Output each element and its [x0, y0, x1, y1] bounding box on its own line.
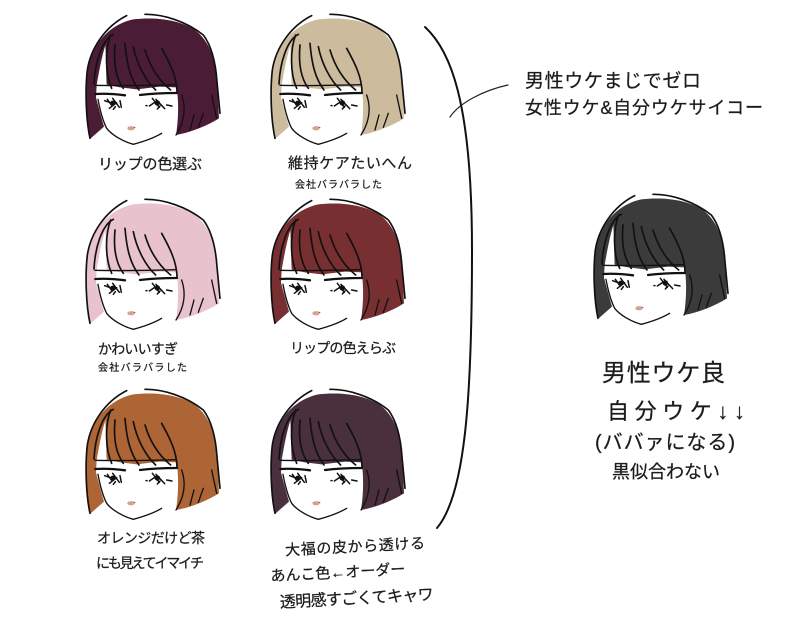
caption: anko purple — [269, 535, 434, 612]
caption: red brown: リップの色えらぶ — [290, 340, 396, 356]
head: orange bob — [86, 389, 220, 519]
head: black bob — [594, 194, 728, 324]
caption: plum: リップの色選ぶ — [98, 156, 202, 173]
note: black hair verdict: 男性ウケ良 — [602, 360, 725, 387]
note: black hair verdict: (ババァになる) — [595, 432, 735, 454]
note: black hair verdict — [595, 360, 745, 482]
caption: anko purple: 大福の皮から透ける — [285, 535, 425, 559]
caption: beige: 会社バラバラした — [295, 178, 382, 191]
caption: beige — [288, 155, 412, 191]
caption: orange: オレンジだけど茶 — [97, 530, 205, 546]
head: beige bob — [271, 14, 405, 144]
caption: beige: 維持ケアたいへん — [288, 155, 412, 172]
head: dark plum bob — [86, 14, 220, 144]
head: red brown bob — [271, 199, 405, 329]
note: group verdict — [525, 70, 763, 118]
caption: orange — [96, 530, 205, 571]
note: group verdict: 女性ウケ&自分ウケサイコー — [525, 98, 763, 118]
caption: pink: 会社バラバラした — [98, 361, 187, 374]
caption: anko purple: あんこ色←オーダー — [270, 561, 406, 585]
caption: pink: かわいいすぎ — [98, 341, 178, 357]
caption: anko purple: 透明感すごくてキャワ — [279, 586, 434, 612]
leader line — [450, 85, 508, 117]
caption: orange: にも見えてイマイチ — [96, 555, 204, 571]
head: pink bob — [86, 199, 220, 329]
head: anko purple bob — [271, 389, 405, 519]
note: group verdict: 男性ウケまじでゼロ — [525, 70, 701, 92]
note: black hair verdict: 自分ウケ↓↓ — [607, 399, 745, 424]
note: black hair verdict: 黒似合わない — [612, 462, 720, 482]
bracket curve — [425, 27, 472, 528]
caption: pink — [98, 341, 187, 374]
